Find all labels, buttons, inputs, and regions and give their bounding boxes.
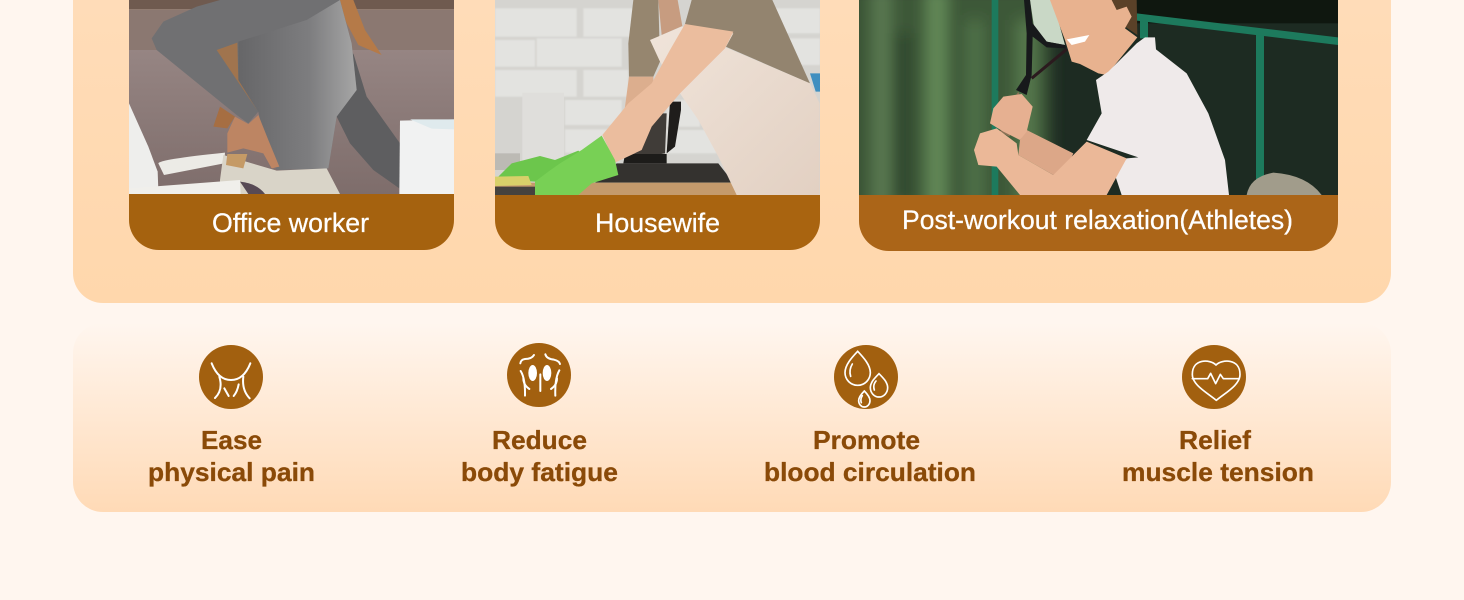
text: ease physical pain: Ease (201, 425, 262, 455)
benefit: reduce body fatigue (461, 343, 618, 487)
card: office worker (129, 0, 454, 250)
panel: benefits (73, 323, 1391, 512)
text: relief muscle tension: muscle tension (1122, 457, 1314, 487)
photo: tennis player (859, 0, 1338, 195)
benefit: ease physical pain (148, 345, 315, 487)
icon: blood drops (834, 345, 898, 409)
text: reduce body fatigue: body fatigue (461, 457, 618, 487)
label bar: athlete (859, 195, 1338, 251)
icon: neck and shoulders (199, 345, 263, 409)
card: athlete (850, 0, 1339, 251)
card: housewife (495, 0, 820, 250)
text: ease physical pain: physical pain (148, 457, 315, 487)
label bar: office worker (129, 194, 454, 250)
label bar: housewife: Housewife (595, 208, 720, 238)
label bar: athlete: Post-workout relaxation(Athletes) (902, 205, 1293, 235)
photo: woman wiping a counter (495, 0, 820, 200)
text: promote blood circulation (764, 425, 976, 487)
text: reduce body fatigue: Reduce (492, 425, 587, 455)
label bar: housewife (495, 195, 820, 250)
benefit: promote blood circulation (764, 345, 976, 487)
text: ease physical pain (148, 425, 315, 487)
photo: woman holding her lower back (129, 0, 454, 200)
text: relief muscle tension (1122, 425, 1314, 487)
icon: upper back (507, 343, 571, 407)
text: relief muscle tension: Relief (1179, 425, 1251, 455)
icon: heart with pulse (1182, 345, 1246, 409)
racket (1030, 0, 1065, 45)
label bar: office worker: Office worker (212, 208, 369, 238)
benefit: relief muscle tension (1122, 345, 1314, 487)
text: reduce body fatigue (461, 425, 618, 487)
text: promote blood circulation: Promote (813, 425, 920, 455)
text: promote blood circulation: blood circulation (764, 457, 976, 487)
panel: target users (73, 0, 1391, 303)
